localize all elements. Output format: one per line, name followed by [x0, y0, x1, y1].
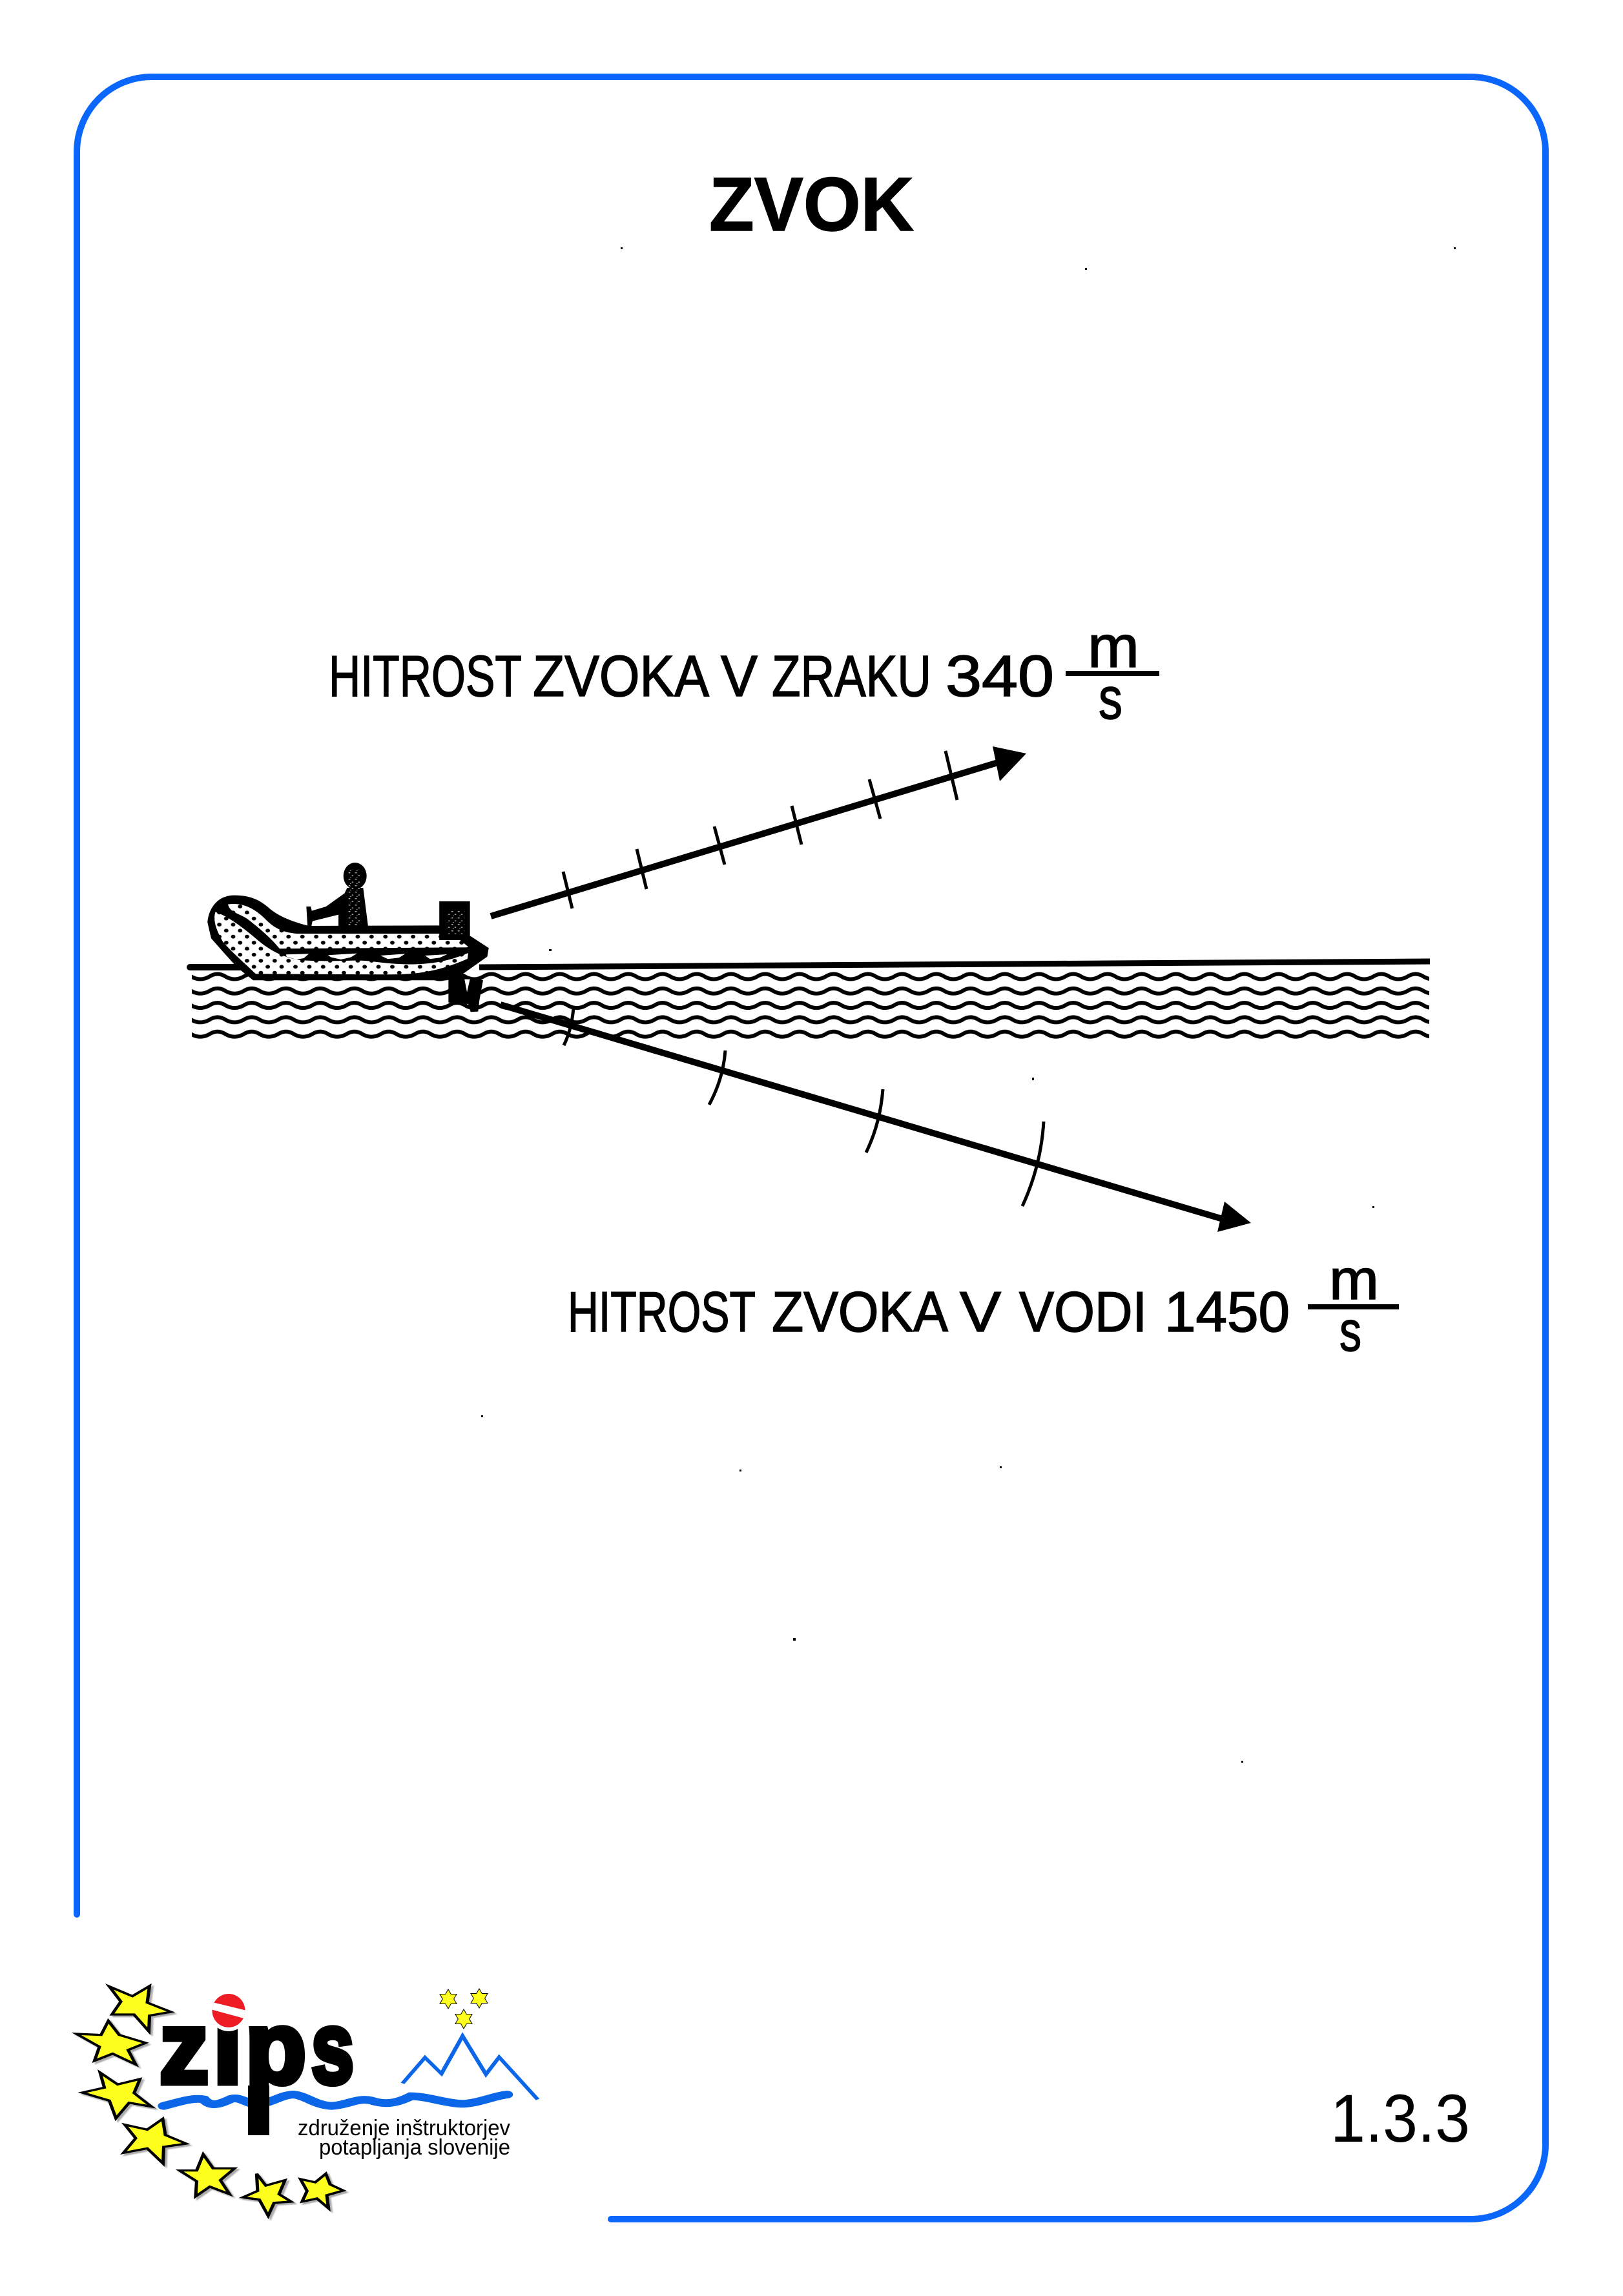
arrow: sound through air — [491, 746, 1026, 916]
logo five-pointed stars — [76, 1986, 344, 2216]
logo organisation name: združenje inštruktorjev — [298, 2116, 510, 2140]
label: speed of sound in water: 1450 — [1164, 1280, 1290, 1344]
unit fraction: m/s water: m — [1329, 1247, 1379, 1311]
label: speed of sound in air: ZVOKA — [533, 644, 709, 709]
label: speed of sound in air: 340 — [946, 644, 1054, 709]
arrow: sound through water — [501, 1005, 1251, 1232]
logo organisation name: potapljanja slovenije — [319, 2135, 510, 2160]
logo wordmark: s — [311, 1991, 354, 2105]
logo wordmark: z — [160, 1991, 209, 2105]
label: speed of sound in water: HITROST — [568, 1280, 756, 1344]
outboard motor — [439, 901, 483, 1012]
page number: 1.3.3 — [1330, 2081, 1470, 2157]
label: speed of sound in air: ZRAKU — [772, 644, 931, 709]
logo wordmark: p — [245, 1991, 306, 2105]
logo organisation name — [298, 2116, 510, 2160]
label: speed of sound in water: VODI — [1019, 1280, 1147, 1344]
logo wordmark: i — [213, 1991, 242, 2105]
water surface and waves — [190, 961, 1430, 1042]
unit fraction: m/s water: s — [1339, 1299, 1361, 1363]
boat with driver and motor — [207, 863, 489, 1012]
title: ZVOK — [709, 162, 914, 247]
label: speed of sound in water — [568, 1280, 1290, 1344]
logo water wave — [163, 2095, 507, 2106]
unit fraction: m/s air — [1066, 614, 1159, 732]
logo wordmark — [160, 1991, 354, 2135]
unit fraction: m/s air: m — [1088, 614, 1139, 680]
inflatable tube lower — [214, 912, 468, 974]
driver — [306, 863, 368, 927]
logo six-pointed stars — [440, 1989, 488, 2029]
unit fraction: m/s air: s — [1099, 666, 1122, 732]
unit fraction: m/s water — [1308, 1247, 1399, 1363]
label: speed of sound in air: HITROST — [329, 644, 522, 709]
white squiggles between tubes — [286, 954, 447, 959]
hull — [207, 896, 489, 980]
label: speed of sound in water: ZVOKA — [772, 1280, 948, 1344]
label: speed of sound in air: V — [721, 644, 758, 709]
label: speed of sound in water: V — [960, 1280, 1001, 1344]
inflatable tube upper — [228, 904, 469, 948]
logo: zips — [76, 1986, 538, 2216]
label: speed of sound in air — [329, 644, 1054, 709]
logo mountain — [402, 2036, 538, 2100]
logo diving flag — [212, 1994, 245, 2031]
scanner specks — [481, 247, 1456, 1763]
